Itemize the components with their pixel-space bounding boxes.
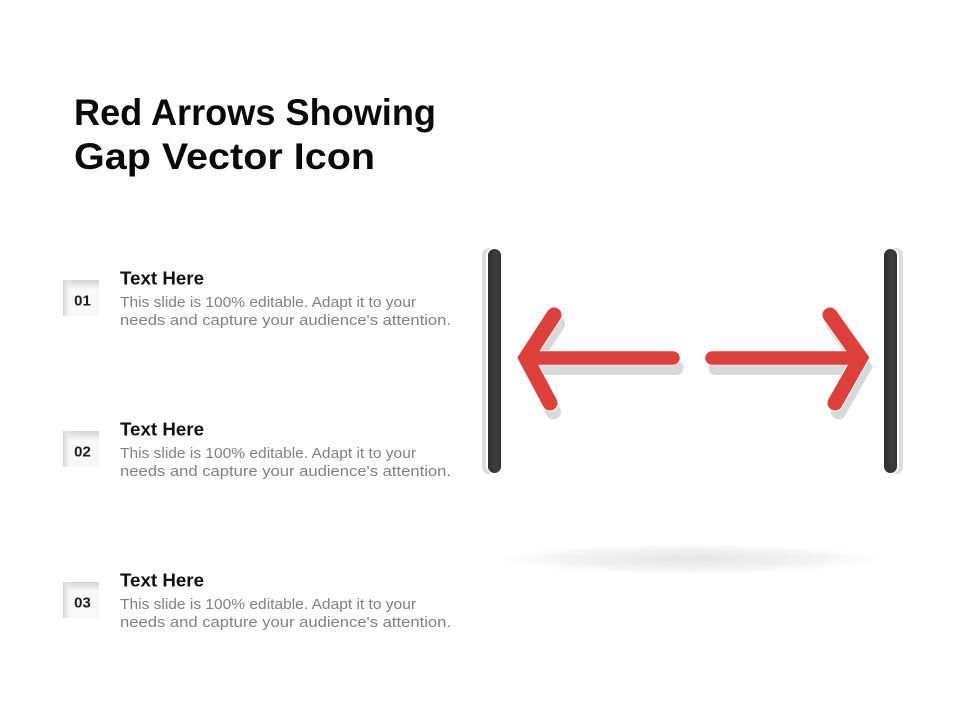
item body 01: This slide is 100% editable. Adapt it to your	[120, 295, 416, 311]
floor shadow	[498, 544, 882, 574]
number badge 03	[63, 582, 99, 618]
item body 03	[120, 597, 451, 631]
item heading 03: Text Here	[120, 570, 204, 590]
item body 02	[120, 446, 451, 480]
arrow: left pointing	[526, 315, 676, 412]
item body 03: This slide is 100% editable. Adapt it to your	[120, 597, 416, 613]
item heading 02: Text Here	[120, 420, 204, 440]
number badge 02: 02	[74, 444, 91, 460]
number badge 01: 01	[74, 292, 91, 310]
title: Red Arrows Showing	[74, 92, 436, 133]
title: Gap Vector Icon	[74, 136, 375, 177]
arrow: right pointing	[712, 315, 864, 412]
item body 01	[120, 295, 451, 329]
number badge 02	[63, 431, 99, 467]
item body 01: needs and capture your audience's attention.	[120, 313, 451, 329]
item heading 01: Text Here	[120, 268, 204, 288]
item body 02: needs and capture your audience's attention.	[120, 464, 451, 480]
icon: left gap bar	[482, 248, 502, 474]
item 01	[63, 268, 451, 329]
item body 02: This slide is 100% editable. Adapt it to your	[120, 446, 416, 462]
item body 03: needs and capture your audience's attention.	[120, 615, 451, 631]
item 03	[63, 570, 451, 631]
title	[74, 92, 436, 177]
icon: right gap bar	[883, 248, 903, 474]
item 02	[63, 420, 451, 480]
number badge 01	[63, 280, 99, 316]
number badge 03: 03	[74, 594, 91, 612]
